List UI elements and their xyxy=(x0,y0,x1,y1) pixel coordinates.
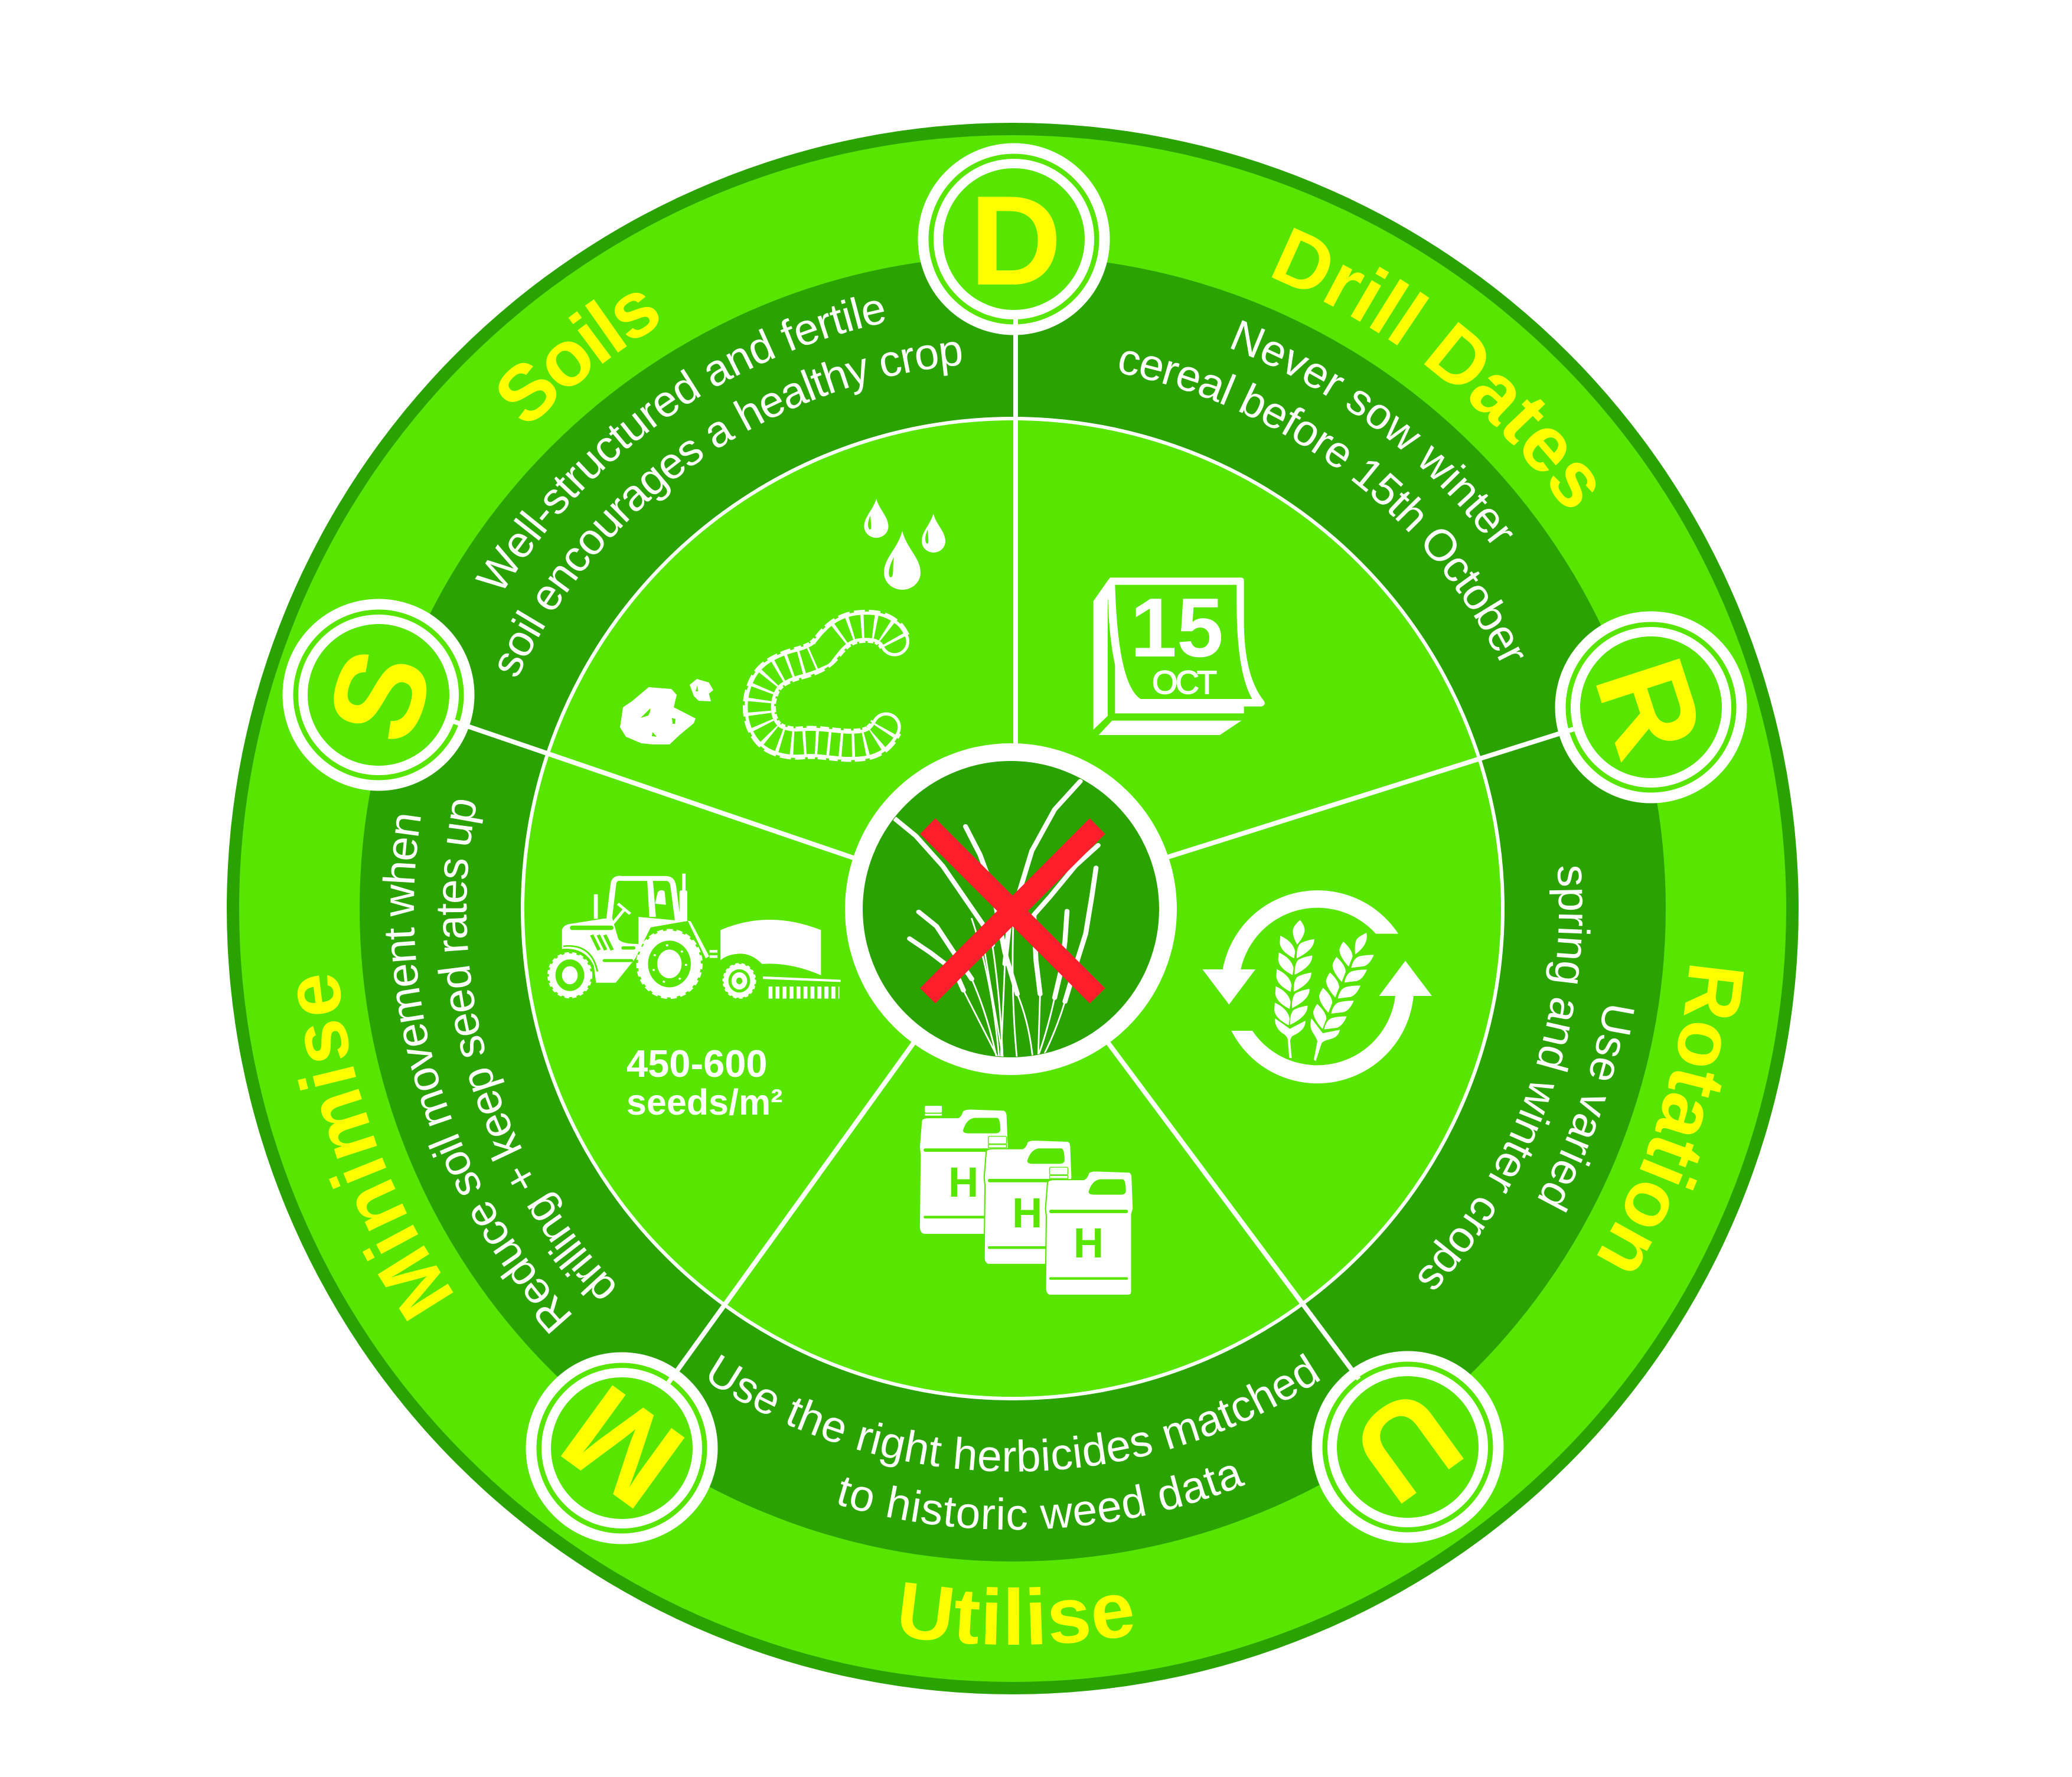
text: utilise: Use the right herbicides matched xyxy=(709,1353,1320,1472)
text: soils: Well-structured and fertile xyxy=(475,296,885,588)
badge: R xyxy=(1560,616,1742,798)
text: minimise: Reduce soil movement when xyxy=(383,815,572,1334)
icon: red cross xyxy=(920,818,1105,1004)
jug 2 xyxy=(984,1140,1072,1265)
front wheel xyxy=(549,953,591,997)
heading: Utilise: Utilise xyxy=(901,1582,1133,1645)
text: drill dates: cereal before 15th October xyxy=(1120,351,1523,661)
icon: wheat ear left xyxy=(1274,920,1314,1058)
icon: water drops xyxy=(864,499,945,590)
icon: rotating wheat xyxy=(1202,890,1432,1083)
heading: Rotation: Rotation xyxy=(1597,966,1744,1271)
seed rate label: 450-600 xyxy=(627,1042,768,1085)
centre weed symbol xyxy=(854,752,1168,1066)
icon: earthworm xyxy=(759,626,895,745)
seed drill xyxy=(710,920,841,998)
text: utilise: to historic weed data xyxy=(838,1465,1246,1530)
icon: circular arrows xyxy=(1202,890,1432,1083)
heading: Soils: Soils xyxy=(498,293,659,422)
text: rotation: Use varied xyxy=(1538,1006,1634,1213)
inner disc xyxy=(523,419,1503,1399)
icon: herbicide jugs: H xyxy=(948,1159,978,1206)
outer disc xyxy=(227,123,1799,1694)
icon: soil clods xyxy=(620,679,713,744)
badge: S xyxy=(288,605,469,785)
text: rotation: spring and winter crops xyxy=(1418,867,1591,1289)
badge: D xyxy=(924,149,1104,329)
icon: calendar 15 OCT: 15 xyxy=(1130,581,1223,675)
text: utilise xyxy=(709,1353,1320,1530)
badge: M: M xyxy=(537,1358,707,1536)
icon: wheat ears xyxy=(1274,920,1374,1061)
badge: S: S xyxy=(299,633,461,758)
icon: herbicide jugs xyxy=(920,1106,1133,1295)
badge: U: U xyxy=(1328,1361,1486,1531)
text: minimise: drilling + keep seed rates up xyxy=(438,800,615,1299)
icon: tractor and seed drill xyxy=(549,874,841,998)
icon: herbicide jugs: H xyxy=(1012,1190,1042,1237)
heading: Minimise: Minimise xyxy=(298,975,453,1321)
jug 1 xyxy=(920,1106,1008,1234)
seed rate label: seeds/m² xyxy=(627,1082,782,1122)
text: soils: soil encourages a healthy crop xyxy=(498,342,961,677)
seed rate label xyxy=(627,1042,782,1122)
jug 3 xyxy=(1046,1171,1133,1295)
text: drill dates: Never sow winter xyxy=(1231,320,1513,543)
tractor body xyxy=(562,874,709,983)
rear wheel xyxy=(638,930,701,998)
icon: calendar 15 OCT xyxy=(1094,577,1265,735)
badge: D: D xyxy=(970,169,1062,312)
wheel infographic xyxy=(227,123,1799,1694)
badge: R: R xyxy=(1568,642,1732,773)
icon: wheat ear right xyxy=(1310,933,1374,1061)
icon: black-grass blades xyxy=(895,781,1098,1062)
icon: herbicide jugs: H xyxy=(1073,1220,1104,1267)
heading: Drill Dates: Drill Dates xyxy=(1272,228,1595,508)
icon: calendar 15 OCT: OCT xyxy=(1152,664,1216,701)
dark text ring xyxy=(360,256,1666,1562)
